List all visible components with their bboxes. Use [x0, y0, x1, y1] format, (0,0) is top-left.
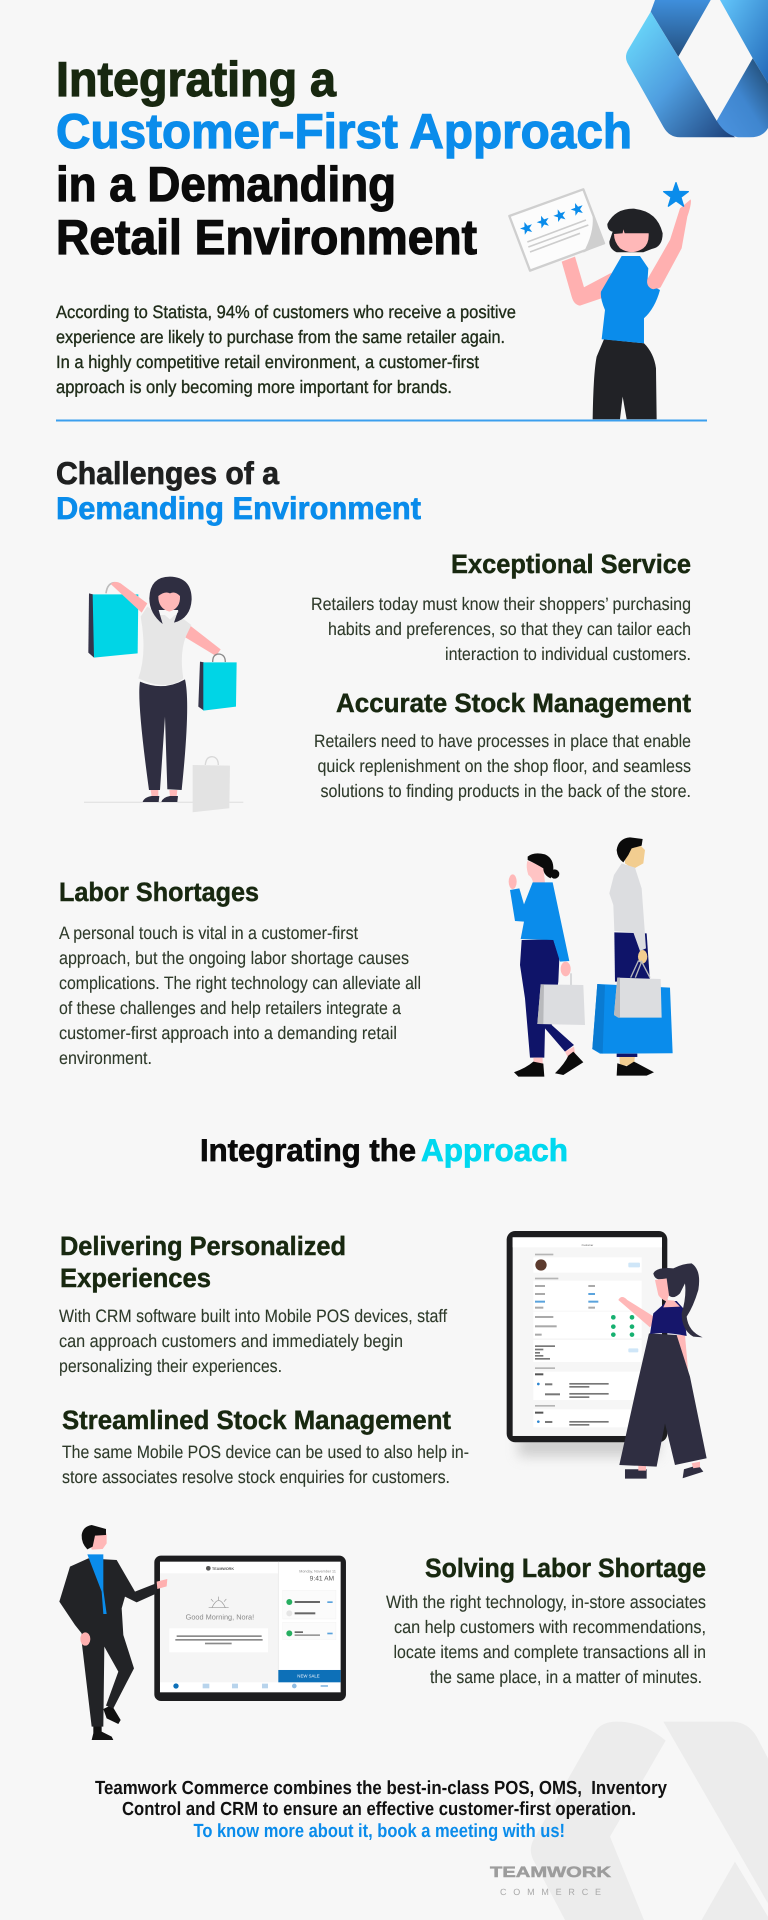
tablet shadow — [518, 1433, 658, 1457]
block: exceptional service: interaction to individual customers. — [445, 644, 691, 664]
block: solving labor shortage: locate items and complete transactions all in — [394, 1642, 706, 1662]
man figure — [592, 837, 673, 1076]
hair — [149, 577, 192, 624]
hair — [607, 209, 663, 252]
intro paragraph: approach is only becoming more important for brands. — [56, 377, 452, 397]
brand wordmark: TEAMWORK — [490, 1864, 611, 1881]
brand wordmark: COMMERCE — [500, 1887, 601, 1897]
illustration: couple with shopping bags — [509, 837, 673, 1077]
illustration: man presenting tablet — [59, 1525, 346, 1740]
tablet frame — [154, 1556, 346, 1701]
shirt — [138, 607, 191, 685]
tablet screen: TEAMWORK — [212, 1567, 234, 1571]
block: accurate stock management: Retailers need to have processes in place that enable — [314, 731, 691, 751]
block: accurate stock management: solutions to finding products in the back of the store. — [320, 781, 691, 801]
right bag — [198, 654, 237, 711]
collar — [161, 612, 179, 619]
block: delivering personalized experiences: Experiences — [60, 1263, 211, 1293]
block: delivering personalized experiences: can approach customers and immediately begin — [59, 1331, 403, 1351]
star held up — [664, 183, 688, 206]
section heading: integrating the approach — [200, 1132, 568, 1168]
tablet screen: NEW SALE — [297, 1673, 320, 1678]
pants — [593, 339, 657, 419]
title line 3: in a Demanding — [56, 158, 396, 212]
title line 2 highlighted: Customer-First Approach — [56, 105, 632, 159]
block: labor shortages: environment. — [59, 1048, 152, 1068]
block: exceptional service — [311, 549, 691, 664]
divider — [56, 420, 707, 422]
title line 4: Retail Environment — [56, 211, 477, 265]
block: labor shortages: complications. The right technology can alleviate all — [59, 973, 421, 993]
block: labor shortages: A personal touch is vital in a customer-first — [59, 923, 358, 943]
block: accurate stock management: Accurate Stock Management — [336, 688, 691, 718]
intro paragraph — [56, 302, 516, 397]
block: solving labor shortage: With the right technology, in-store associates — [386, 1592, 706, 1612]
block: exceptional service: Exceptional Service — [451, 549, 691, 579]
block: exceptional service: habits and preferences, so that they can tailor each — [328, 619, 691, 639]
tablet screen: Monday, November 11 — [299, 1570, 336, 1574]
ankles — [151, 790, 177, 797]
block: accurate stock management — [314, 688, 691, 801]
right arm — [185, 626, 221, 656]
block: labor shortages — [59, 877, 421, 1068]
intro paragraph: According to Statista, 94% of customers who receive a positive — [56, 302, 516, 322]
raised arm — [647, 199, 691, 289]
tablet screen: 9:41 AM — [310, 1575, 334, 1582]
illustration: shopper with bags — [84, 577, 243, 812]
section heading: integrating the approach: Approach — [421, 1132, 568, 1168]
illustration: tablet with customer profile and woman — [507, 1231, 707, 1479]
shoes — [143, 796, 178, 802]
block: delivering personalized experiences: Delivering Personalized — [60, 1231, 346, 1261]
block: delivering personalized experiences: personalizing their experiences. — [59, 1356, 282, 1376]
section heading: challenges: Challenges of a — [56, 455, 279, 491]
closing statement: To know more about it, book a meeting with us! — [194, 1821, 565, 1842]
tablet frame — [507, 1231, 667, 1442]
woman figure — [509, 853, 585, 1077]
block: delivering personalized experiences — [59, 1231, 448, 1376]
block: labor shortages: approach, but the ongoing labor shortage causes — [59, 948, 409, 968]
raised arm — [111, 582, 147, 613]
closing statement: Teamwork Commerce combines the best-in-class POS, OMS, Inventory — [95, 1778, 667, 1799]
tablet screen — [513, 1237, 662, 1436]
ground bag — [193, 757, 230, 812]
title — [56, 53, 632, 265]
tablet screen — [160, 1562, 341, 1692]
block: delivering personalized experiences: With CRM software built into Mobile POS devices, staff — [59, 1306, 448, 1326]
block: solving labor shortage: Solving Labor Shortage — [425, 1553, 706, 1583]
top — [601, 256, 660, 343]
block: solving labor shortage — [386, 1553, 706, 1687]
watermark logo bottom right — [531, 1722, 768, 1920]
intro paragraph: experience are likely to purchase from the same retailer again. — [56, 327, 505, 347]
man figure — [59, 1525, 167, 1740]
block: labor shortages: of these challenges and help retailers integrate a — [59, 998, 402, 1018]
logo ribbon top right — [626, 0, 768, 137]
block: streamlined stock management — [62, 1405, 469, 1487]
review card — [509, 189, 604, 271]
tablet screen: Good Morning, Nora! — [186, 1613, 254, 1621]
woman pointing at tablet — [618, 1263, 707, 1479]
left bag — [88, 583, 138, 658]
ground line — [84, 802, 243, 803]
block: streamlined stock management: store associates resolve stock enquiries for customers. — [62, 1467, 450, 1487]
face — [614, 229, 649, 252]
left arm — [562, 257, 612, 306]
face — [158, 592, 180, 612]
block: streamlined stock management: The same Mobile POS device can be used to also help in- — [62, 1442, 469, 1462]
block: streamlined stock management: Streamlined Stock Management — [62, 1405, 451, 1435]
block: exceptional service: Retailers today must know their shoppers’ purchasing — [311, 594, 691, 614]
pants — [139, 679, 187, 790]
closing statement: Control and CRM to ensure an effective customer-first operation. — [122, 1799, 636, 1820]
section heading: integrating the approach: Integrating the — [200, 1132, 416, 1168]
block: solving labor shortage: can help customers with recommendations, — [394, 1617, 706, 1637]
intro paragraph: In a highly competitive retail environment, a customer-first — [56, 352, 479, 372]
block: labor shortages: Labor Shortages — [59, 877, 259, 907]
brand wordmark — [490, 1864, 611, 1897]
block: labor shortages: customer-first approach into a demanding retail — [59, 1023, 397, 1043]
block: solving labor shortage: the same place, in a matter of minutes. — [430, 1667, 702, 1687]
block: accurate stock management: quick replenishment on the shop floor, and seamless — [318, 756, 691, 776]
illustration: woman holding review card — [509, 183, 691, 419]
tablet screen: Customer — [582, 1244, 593, 1247]
raised arm sleeve — [647, 240, 670, 289]
closing statement — [95, 1778, 667, 1842]
title line 1: Integrating a — [56, 53, 337, 107]
section heading: challenges: Demanding Environment — [56, 490, 421, 526]
section heading: challenges — [56, 455, 421, 526]
